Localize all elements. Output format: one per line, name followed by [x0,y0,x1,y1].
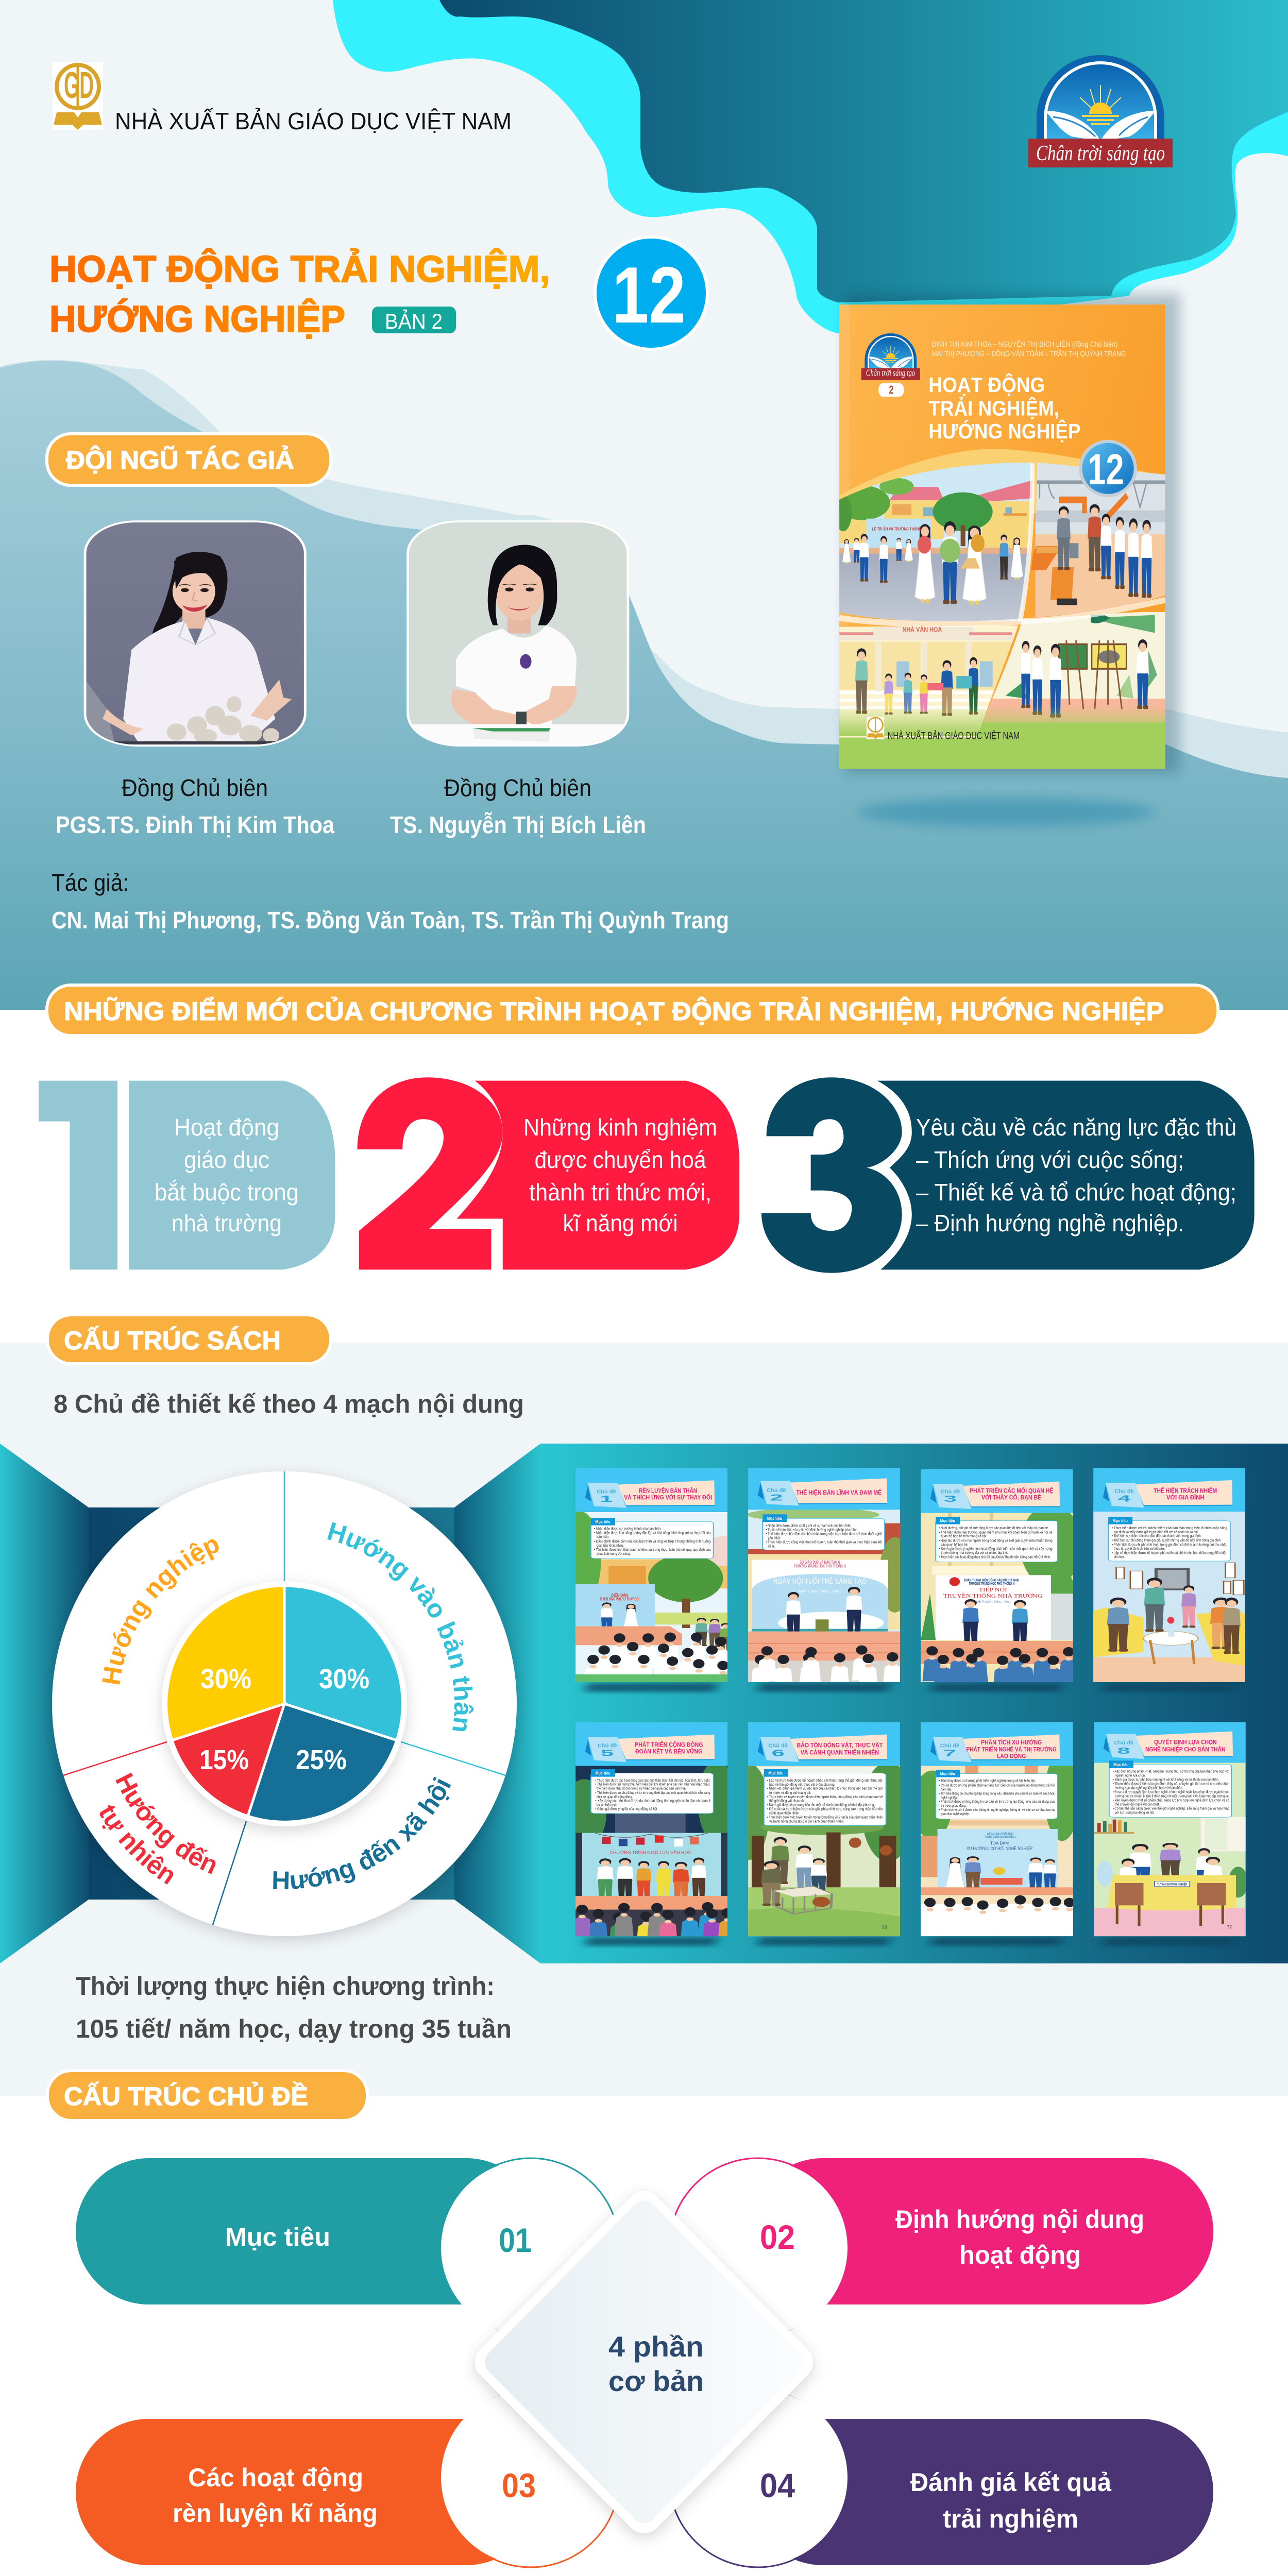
section heading: book structure [47,1315,331,1364]
page: topic 4: Chủ đề [1114,1488,1134,1494]
publisher logo and name: NHÀ XUẤT BẢN GIÁO DỤC VIỆT NAM [115,108,512,134]
topic pages row 2: BẢO TỒN ĐỘNG VẬT, THỰC VẬT [797,1741,883,1749]
new point 3: – Định hướng nghề nghiệp. [916,1210,1184,1236]
page: topic 8: với lực lượng lao động xã hội. [1115,1810,1155,1815]
pie percentages: 30% [319,1664,369,1694]
part 03: skill activities: 03 [502,2466,536,2504]
topic pages row 1: • Đánh giá được ý nghĩa của hoạt động phát triển các mối quan hệ và xây dựng [939,1547,1053,1551]
part 04: evaluation: Đánh giá kết quả [910,2468,1112,2497]
page: topic 1 [575,1468,727,1682]
topic pages row 1: NGÀY HỘI TUỔI TRẺ SÁNG TẠO [773,1577,867,1586]
topic pages row 2: • Xây dựng và triển khai được dự án hoạt động tình nguyện nhân đạo và quản lí [596,1799,710,1803]
book cover: main textbook: TRẢI NGHIỆM, [928,397,1059,420]
page: topic 4: thực tế, quyết định chi tiêu và tiết kiệm. [1114,1547,1165,1551]
ring label: society: Hướng đến xã hội [273,1776,451,1890]
book cover: main textbook: HOẠT ĐỘNG [928,373,1045,397]
page: topic 7: XU HƯỚNG, CƠ HỘI NGHỀ NGHIỆP [967,1846,1032,1851]
page: topic 3: ĐOÀN THANH NIÊN CỘNG SẢN HỒ CHÍ MINH [964,1578,1020,1582]
page: topic 7: hiện đại. [941,1787,952,1791]
part 02: content orientation: 02 [760,2218,795,2256]
part 02: content orientation: hoạt động [959,2241,1081,2269]
page: topic 6: và hành động chung tay gìn giữ cảnh quan thiên nhiên. [769,1819,844,1823]
ring label: nature line 2: tự nhiên [93,1800,181,1890]
topic pages row 1: • Nuôi dưỡng, giữ gìn và mở rộng được các quan hệ tốt đẹp với thầy cô, bạn bè. [939,1526,1049,1530]
programme duration text: 105 tiết/ năm học, dạy trong 35 tuần [76,2014,512,2043]
topic pages row 1: • Điều chỉnh được cảm xúc của bản thân và ứng xử hợp lí trong những tình huống [594,1539,710,1544]
page: topic 2: TRƯỜNG TRUNG HỌC PHỔ THÔNG X [794,1564,846,1569]
page: topic 6: bảo vệ thế giới động vật, thực vật ở địa phương. [769,1783,835,1787]
page shadows [584,1683,1236,1692]
topic pages row 2: VÀ CẢNH QUAN THIÊN NHIÊN [801,1749,879,1756]
lower-left blue wave [0,361,1288,1010]
page: topic 7: SỞ GIÁO DỤC VÀ ĐÀO TẠO X [987,1832,1014,1836]
page: topic 3: VỚI THẦY CÔ, BẠN BÈ [981,1494,1041,1501]
new point 1: nhà trường [172,1210,282,1236]
page: topic 8 [1094,1719,1248,1936]
topic pages row 1: • Thể hiện được lập trường, quan điểm phù hợp khi phản biện dư luận xã hội về [939,1530,1053,1534]
part 04: evaluation: trải nghiệm [943,2504,1078,2533]
topic pages row 1: THỂ HIỆN BẢN LĨNH VÀ ĐAM MÊ [796,1488,882,1496]
new point 2 [358,1077,739,1269]
page: topic 2: Chủ đề [767,1487,786,1494]
new point 1 [39,1081,335,1269]
page: topic 1: giao tiếp khác nhau. [597,1544,624,1548]
book cover: main textbook: ĐINH THỊ KIM THOA – NGUYỄN THỊ BÍCH LIÊN (đồng Chủ biên) [932,340,1117,348]
page: topic 5: ĐOÀN KẾT VÀ BỀN VỮNG [635,1748,702,1755]
topic pages row 2: • Đánh giá được thực trạng bảo tồn một số danh lam thắng cảnh ở địa phương. [767,1803,875,1807]
topic pages row 2: • Phân tích và xử lí được các thông tin nghề nghiệp, thông tin về các cơ sở đào tạo và [939,1808,1055,1812]
page: topic 6: thế giới động vật, thực vật. [769,1799,805,1803]
page: topic 7: giáo dục nghề nghiệp. [941,1812,970,1816]
page: topic 2 [748,1468,900,1682]
programme duration text: Thời lượng thực hiện chương trình: [76,1972,495,2001]
section heading: author team: ĐỘI NGŨ TÁC GIẢ [66,445,294,474]
pie percentages: 25% [296,1744,347,1775]
pie percentages [199,1664,369,1775]
page: topic 7: PHÂN TÍCH XU HƯỚNG [981,1739,1042,1746]
part 03: skill activities: Các hoạt động [188,2463,363,2492]
page: topic 1: RÈN LUYỆN BẢN THÂN [639,1487,697,1494]
publisher logo and name [53,62,512,134]
page shadows [584,1937,1236,1946]
page: topic 8: Mục tiêu [1113,1762,1128,1767]
page: topic 7: TRƯỜNG TRUNG HỌC PHỔ THÔNG C [985,1835,1016,1839]
page: topic 2: Huyện X, ngày ... tháng ... năm ... [798,1589,842,1593]
pie slice: 15% nature [172,1704,284,1816]
page: topic 1: 1 [600,1494,613,1504]
page: topic 3: quan hệ bạn bè trên mạng xã hội. [941,1534,987,1538]
page: topic 4: phù hợp. [1114,1555,1125,1559]
author captions: PGS.TS. Đinh Thị Kim Thoa [56,811,334,838]
page: topic 3: truyền thống nhà trường đối với cá nhân, tập thể. [941,1551,1008,1555]
book cover: main textbook: HƯỚNG NGHIỆP [928,419,1081,443]
author photo 1 [84,520,307,747]
page: topic 5: chia sẻ, giúp đỡ cộng đồng. [597,1795,633,1799]
topic pages row 1: • Thực hiện được công việc theo kế hoạch, tuân thủ thời gian và thực hiện cam kết [766,1540,882,1544]
ring label: career: Hướng nghiệp [102,1539,218,1685]
center diamond: 4 basic parts: cơ bản [608,2365,704,2397]
author captions: CN. Mai Thị Phương, TS. Đồng Văn Toàn, TS. Trần Thị Quỳnh Trang [52,907,729,934]
topic pages row 1: • Thể hiện được bản lĩnh của bản thân trong việc thực hiện đam mê theo đuổi nghề [766,1532,882,1536]
publisher logo and name: GD [64,65,94,106]
page: topic 7: Chủ đề [940,1743,959,1749]
topic pages row 2: • Thực hiện được các hoạt động giáo dục tinh thần đoàn kết dân tộc, hoà bình, hữu nghị. [596,1778,710,1783]
new point 2: thành tri thức mới, [529,1179,711,1206]
header wave: dark gradient [439,0,1288,302]
ring label: self: Hướng vào bản thân [327,1522,474,1731]
book cover shadow [845,294,1180,827]
part 02: content orientation: Định hướng nội dung [895,2205,1144,2234]
new point 2: Những kinh nghiệm [523,1114,717,1141]
new point 2: được chuyển hoá [535,1146,706,1173]
topic pages row 1: • Hợp tác được với mọi người trong hoạt động và biết giải quyết mâu thuẫn trong [939,1538,1053,1543]
page: topic 7: nghề nghiệp. [941,1795,958,1800]
topic pages row 1: • Thực hiện các hoạt động theo chủ đề của Đoàn Thanh niên Cộng sản Hồ Chí Minh. [939,1555,1051,1559]
new point 1: bắt buộc trong [155,1179,299,1206]
programme duration text [76,1972,512,2043]
new point 1: giáo dục [184,1146,269,1173]
page: topic 5 [562,1722,737,1947]
book cover: main textbook: MAI THỊ PHƯƠNG – ĐỒNG VĂN TOẢN – TRẦN THỊ QUỲNH TRANG [932,349,1126,358]
pie slice: 30% career [166,1586,284,1740]
topic pages row 2: • Lập và thực hiện được kế hoạch khảo sát thực trạng thế giới động vật, thực vật, [767,1778,883,1783]
page: topic 6: 6 [771,1748,785,1758]
section heading: topic structure: CẤU TRÚC CHỦ ĐỀ [64,2081,308,2111]
badge: Bản 2: BẢN 2 [385,309,443,333]
page: topic 5: 5 [601,1748,614,1758]
topic pages row 2: • Thể hiện được sự hứng thú, ham hiểu biết khi khám phá các nền văn hoá khác nhau; [596,1782,710,1786]
header wave: cyan [333,0,1288,333]
part 01: objectives: 01 [499,2221,532,2259]
section heading: author team [47,434,331,485]
book cover: main textbook: Chân trời sáng tạo [866,368,916,378]
page: topic 2: • Nhận diện được phẩm chất ý chí và sự đam mê của bản thân. [766,1523,852,1528]
pie wheel: content strands [52,1471,517,1936]
part 03: skill activities: rèn luyện kĩ năng [173,2499,378,2528]
author captions [52,774,729,934]
author captions: TS. Nguyễn Thị Bích Liên [390,811,646,838]
new point 2: kĩ năng mới [563,1210,678,1236]
page: topic 5: Mục tiêu [596,1771,611,1776]
new point 3 [761,1077,1255,1273]
page: topic 7: Mục tiêu [940,1772,955,1776]
part 02: content orientation [669,2158,1213,2335]
page: topic 6: tự nhiên và động vật hoang dã. [769,1791,811,1795]
page: topic 5: thể hiện được thái độ tôn trọng sự khác biệt giữa các nền văn hoá. [597,1786,686,1790]
page: topic 2: yêu thích. [768,1536,781,1540]
new point 1: Hoạt động [174,1114,279,1141]
topic pages row 2: • Thể hiện được sự chủ động và tự tin trong thiết lập các mối quan hệ xã hội, sẵn sàng [596,1791,710,1795]
page: topic 6: Mục tiêu [768,1771,783,1776]
page: topic 3: Huyện X, ngày ... tháng ... năm ... [974,1599,1011,1603]
author captions: Đồng Chủ biên [444,774,591,801]
part 01: objectives [76,2158,619,2335]
new point 3: – Thiết kế và tổ chức hoạt động; [916,1179,1236,1206]
page: topic 1: Mục tiêu [596,1520,611,1524]
pie percentages: 30% [200,1664,251,1694]
topic pages row 1: • Nhận diện được khả năng tư duy độc lập và khả năng thích ứng với sự thay đổi của [594,1531,711,1535]
page: topic 2: đã ra. [768,1544,775,1548]
grade 12 circle: 12 [612,250,686,340]
page: topic 5: Chủ đề [598,1743,617,1749]
author captions: Tác giả: [52,869,129,896]
page: topic 3 [921,1469,1082,1691]
part 04: evaluation: 04 [760,2466,795,2504]
pie slice: 30% self [284,1586,402,1740]
page: topic 3: TRUYỀN THỐNG NHÀ TRƯỜNG [943,1593,1042,1599]
part 03: skill activities [76,2390,619,2567]
book cover: main textbook [835,304,1165,769]
page: topic 5: dự án hiệu quả. [597,1803,617,1807]
book cover: main textbook: NHÀ XUẤT BẢN GIÁO DỤC VIỆT NAM [888,730,1020,741]
page: topic 7: LAO ĐỘNG [997,1752,1026,1759]
section heading: book structure: CẤU TRÚC SÁCH [64,1326,281,1355]
page: topic 6: cảnh quan thiên nhiên. [769,1811,800,1815]
page: topic 1: • Nhận diện được sự trưởng thành của bản thân. [594,1527,662,1531]
pie percentages: 15% [199,1744,249,1775]
topic pages row 1: • Thể hiện được tinh thần trách nhiệm, sự trung thực, tuân thủ nội quy, quy định của [594,1548,711,1552]
new point 3: – Thích ứng với cuộc sống; [916,1146,1184,1173]
page: topic 8: Chủ đề [1114,1740,1133,1746]
topic pages row 2: • Nhận xét, đánh giá hành vi, việc làm của cá nhân, tổ chức trong việc bảo tồn thế giới [767,1786,883,1790]
author photo 2 [406,520,629,747]
topic pages row 2: • Thực hiện và tuyên truyền được đến người thân, cộng đồng các biện pháp bảo vệ [767,1795,883,1799]
page: topic 8: thể chuyển đổi nghề khi cần thiết. [1115,1802,1160,1806]
topic pages row 1 [559,1466,1246,1696]
page: topic 3: TIẾP NỐI [979,1587,1007,1593]
part 04: evaluation [669,2390,1213,2567]
title [49,248,550,340]
page: topic 7: TOẠ ĐÀM [990,1841,1009,1846]
book cover: main textbook: 2 [889,384,893,397]
page: topic 8: 8 [1117,1745,1130,1756]
3D room backdrop [0,1444,1288,1963]
ring label: nature: Hướng đến [110,1769,223,1880]
page: topic 1: pháp luật trong đời sống. [597,1552,631,1556]
page: topic 6 [730,1722,914,1936]
badge: Bản 2 [372,307,456,333]
page: topic 7 [912,1722,1080,1936]
title: HOẠT ĐỘNG TRẢI NGHIỆM, [49,248,550,290]
page: topic 7: thị trường lao động. [941,1804,967,1808]
page: topic 3: 3 [944,1494,957,1504]
section heading: new points: NHỮNG ĐIỂM MỚI CỦA CHƯƠNG TRÌNH HOẠT ĐỘNG TRẢI NGHIỆM, HƯỚNG NGHIỆP [64,996,1164,1026]
part 01: objectives: Mục tiêu [225,2223,330,2251]
page: topic 4: Mục tiêu [1113,1519,1128,1523]
book cover: main textbook: LỄ TRI ÂN VÀ TRƯỞNG THÀNH [872,526,921,532]
topic pages row 2: • Phân tích được những thông tin cơ bản về thị trường lao động, nhu cầu sử dụng của [939,1800,1055,1804]
page: topic 6: Chủ đề [768,1743,788,1749]
page: topic 8: TƯ VẤN HƯỚNG NGHIỆP [1157,1883,1187,1886]
page: topic 1: bản thân. [597,1535,609,1539]
pie slice: 25% society [248,1704,397,1822]
topic pages row 2: • Trình bày được xu hướng phát triển nghề nghiệp trong xã hội hiện đại. [939,1778,1036,1783]
author captions: Đồng Chủ biên [122,774,268,801]
topic pages row 2: • Chỉ ra được những phẩm chất và năng lực cần có của người lao động trong xã hội [939,1783,1055,1787]
topic pages row 2 [562,1719,1248,1947]
page: topic 1: Chủ đề [597,1489,616,1495]
grade 12 circle [594,235,709,351]
section heading: topic structure [47,2071,367,2121]
topic pages row 1: VÀ THÍCH ỨNG VỚI SỰ THAY ĐỔI [624,1494,712,1501]
series logo: Chân trời sáng tạo: Chân trời sáng tạo [1036,142,1165,165]
page: topic 3: các quan hệ bạn bè. [941,1543,968,1547]
page: topic 4: 4 [1117,1494,1131,1504]
lower-left pale band [0,360,1288,1010]
page: topic 1: DIỄN ĐÀN [611,1592,628,1598]
new point 3: Yêu cầu về các năng lực đặc thù [916,1114,1236,1141]
page: topic 2: SỞ GIÁO DỤC VÀ ĐÀO TẠO G [800,1560,840,1565]
page: topic 2: • Tự tin về bản thân và tự tin với định hướng nghề nghiệp của mình. [766,1528,858,1532]
title: HƯỚNG NGHIỆP [49,298,345,340]
subheading: 8 topics: 8 Chủ đề thiết kế theo 4 mạch nội dung [54,1389,524,1418]
series logo: Chân trời sáng tạo [1028,55,1173,167]
topic pages row 1: PHÁT TRIỂN CÁC MỐI QUAN HỆ [970,1487,1053,1494]
topic pages row 2: PHÁT TRIỂN NGHỀ VÀ THỊ TRƯỜNG [967,1745,1057,1753]
page: topic 5: CHƯƠNG TRÌNH GIAO LƯU VĂN HOÁ [610,1850,691,1855]
page: topic 3: Mục tiêu [940,1519,955,1523]
topic pages row 2: • Thực hiện được việc tuyên truyền trong cộng đồng về ý nghĩa của cảnh quan thiên nhiên [767,1815,883,1819]
section heading: new points [47,985,1218,1036]
page: topic 8: 77 [1227,1925,1232,1929]
page: topic 3: TRƯỜNG TRUNG HỌC PHỔ THÔNG N [969,1581,1014,1586]
page: topic 7: 7 [943,1748,956,1758]
book cover: main textbook: NHÀ VĂN HOÁ [903,625,942,634]
page: topic 8: ngành, nghề lựa chọn. [1115,1773,1146,1777]
page: topic 5: • Đánh giá được ý nghĩa của hoạt động xã hội. [596,1807,658,1811]
topic pages row 2: • Đề xuất và thực hiện được các giải pháp tích cực, sáng tạo trong việc bảo tồn [767,1807,883,1811]
page: topic 4 [1093,1468,1246,1682]
page: topic 1: THÍCH ỨNG VỚI SỰ THAY ĐỔI [600,1597,639,1602]
page: topic 4: VỚI GIA ĐÌNH [1166,1494,1204,1501]
page: topic 5: PHÁT TRIỂN CỘNG ĐỒNG [635,1741,703,1748]
page: topic 3: Chủ đề [941,1489,960,1495]
book cover: main textbook: 12 [1088,446,1124,494]
page: topic 6: 53 [882,1925,887,1929]
page: topic 2: Mục tiêu [767,1516,782,1521]
center diamond: 4 basic parts [493,2209,795,2515]
center diamond: 4 basic parts: 4 phần [608,2330,704,2363]
page: topic 2: 2 [770,1493,783,1503]
